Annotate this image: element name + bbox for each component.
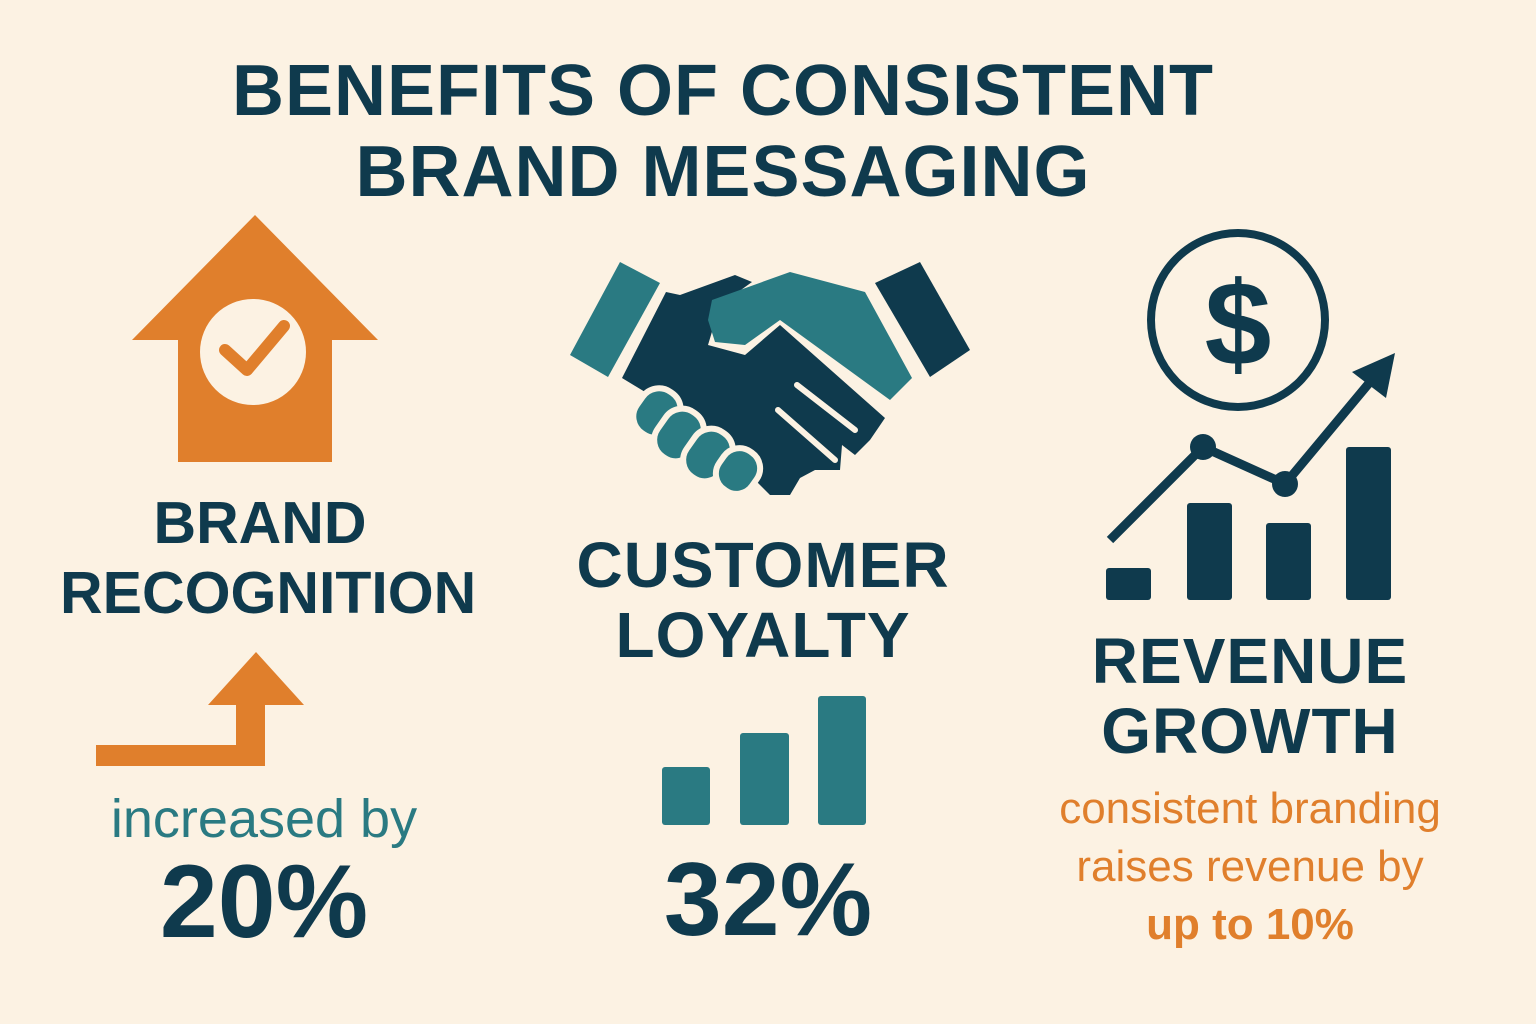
text: increased by 20% [111, 789, 417, 960]
title: BRAND MESSAGING [355, 132, 1091, 212]
icon: dollar coin: $ [1205, 257, 1271, 391]
title [232, 51, 1214, 212]
heading: customer loyalty: LOYALTY [615, 599, 911, 671]
icon: handshake [570, 262, 970, 501]
text: 32%: 32% [664, 842, 872, 958]
heading: customer loyalty [576, 529, 950, 671]
text: revenue note: up to 10% [1146, 900, 1354, 949]
text: revenue note: consistent branding [1059, 784, 1441, 833]
title: BENEFITS OF CONSISTENT [232, 51, 1214, 131]
text: revenue note: raises revenue by [1076, 842, 1424, 891]
heading: revenue growth: REVENUE [1092, 625, 1408, 697]
text: increased by 20%: 20% [160, 844, 368, 960]
text: revenue note [1059, 784, 1441, 949]
chart: revenue growth [1106, 353, 1395, 600]
text: increased by 20%: increased by [111, 789, 417, 849]
icon: dollar coin [1151, 233, 1325, 407]
heading: brand recognition [60, 490, 476, 626]
icon: arrow house with check [132, 215, 378, 462]
heading: customer loyalty: CUSTOMER [576, 529, 950, 601]
chart: loyalty bars [662, 696, 866, 825]
heading: revenue growth: GROWTH [1101, 695, 1399, 767]
heading: brand recognition: BRAND [153, 490, 367, 556]
heading: revenue growth [1092, 625, 1408, 767]
icon: bent up arrow [96, 652, 304, 766]
heading: brand recognition: RECOGNITION [60, 560, 476, 626]
